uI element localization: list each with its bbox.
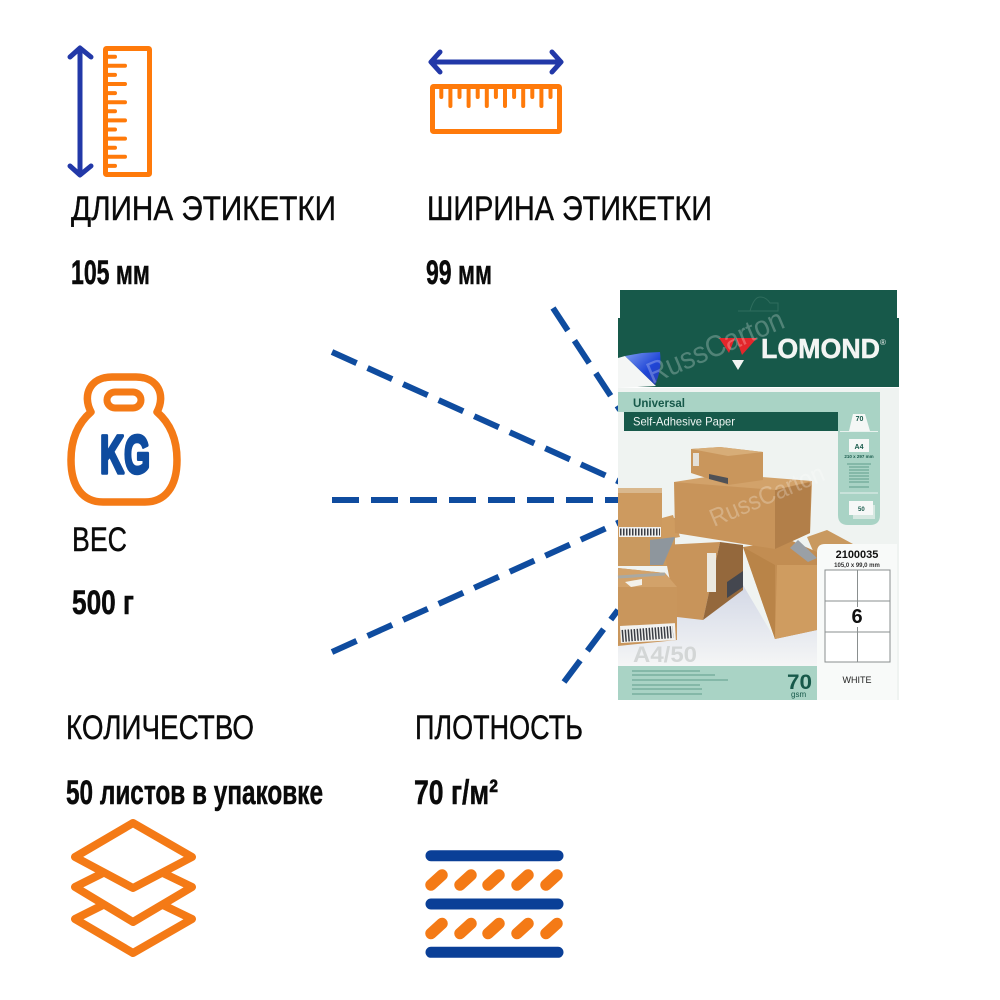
weight badge: 70 [856,416,863,423]
format badge [840,432,878,487]
bottom green strip: 70 [787,671,812,694]
label layout panel: 2100035 [836,549,878,561]
universal band [618,392,880,412]
package background [618,388,899,700]
self-adhesive paper band: Self-Adhesive Paper [633,414,735,428]
LOMOND logo [719,333,886,370]
value: label length: 105 мм [71,254,150,292]
value: label width: 99 мм [426,254,492,292]
icon: kettlebell weight: KG [100,425,150,485]
heading: label width: ШИРИНА ЭТИКЕТКИ [427,190,712,228]
weight badge [849,414,870,431]
value: quantity: 50 листов в упаковке [66,774,323,812]
label layout panel: WHITE [842,675,872,685]
self-adhesive paper band [624,412,838,431]
heading: density: ПЛОТНОСТЬ [415,709,583,747]
heading: quantity: КОЛИЧЕСТВО [66,709,254,747]
LOMOND logo: ® [880,338,886,347]
value: density: 70 г/м² [414,774,498,812]
sheet count badge [840,493,878,519]
A4/50 mark: A4/50 [633,642,697,667]
product package photo [618,290,899,700]
watermark: RussCarton [642,303,789,390]
bottom green strip [618,666,817,700]
value: weight: 500 г [72,584,134,622]
bottom green strip: gsm [791,690,806,699]
sheet count badge: 50 [858,507,865,513]
icon: horizontal ruler with arrow [431,52,561,132]
label layout panel: 105,0 x 99,0 mm [834,563,880,569]
icon: paper density layers [431,856,558,952]
package green header [618,290,899,387]
heading: weight: ВЕС [72,521,127,559]
universal band: Universal [633,396,685,410]
right info column [838,412,880,525]
format badge: 210 x 297 mm [844,454,874,459]
icon: stacked sheets [75,823,192,953]
heading: label length: ДЛИНА ЭТИКЕТКИ [71,190,336,228]
label layout panel [817,544,897,700]
cardboard boxes illustration [618,447,853,667]
LOMOND logo: LOMOND [761,333,880,364]
watermark [642,303,829,533]
hanger outline [738,297,778,311]
icon: vertical ruler with arrow [70,48,150,175]
watermark: RussCarton [705,459,829,533]
label layout panel: 6 [851,606,863,628]
dashed pointer lines [332,308,620,682]
format badge: A4 [855,444,864,451]
blue peeled corner [618,352,660,388]
icon: kettlebell weight [71,377,177,502]
